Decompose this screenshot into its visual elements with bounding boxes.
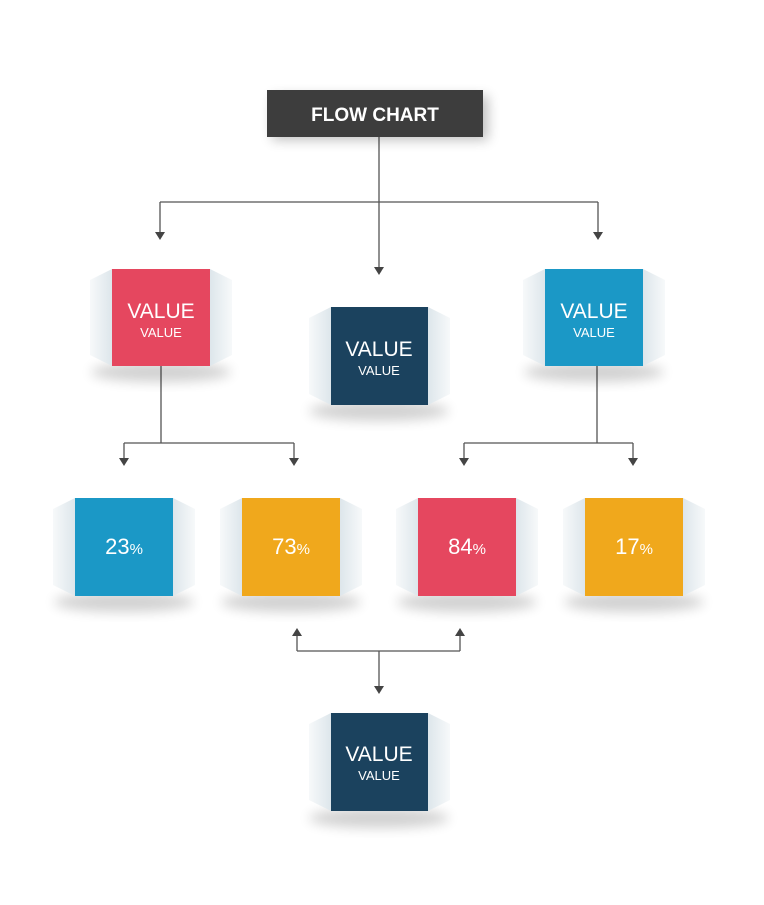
arrowheads	[119, 232, 638, 694]
box: dark value center	[309, 307, 450, 421]
box: dark value bottom: VALUE	[358, 768, 400, 783]
box: blue value right: VALUE	[573, 325, 615, 340]
box: 84%	[396, 498, 538, 612]
connector lines	[124, 137, 633, 691]
box: 73%	[220, 498, 362, 612]
box: blue value right: VALUE	[560, 300, 628, 323]
box: 17%: 17%	[615, 534, 653, 559]
box: 23%: 23%	[105, 534, 143, 559]
box: red value left	[90, 269, 232, 382]
box: red value left: VALUE	[127, 300, 195, 323]
box: 73%: 73%	[272, 534, 310, 559]
title: FLOW CHART	[311, 105, 439, 126]
box: 23%	[53, 498, 195, 612]
box: 84%: 84%	[448, 534, 486, 559]
box: dark value bottom	[309, 713, 450, 828]
box: 17%	[563, 498, 705, 612]
box: dark value bottom: VALUE	[345, 743, 413, 766]
title	[267, 90, 488, 140]
box: dark value center: VALUE	[345, 338, 413, 361]
box: red value left: VALUE	[140, 325, 182, 340]
box: dark value center: VALUE	[358, 363, 400, 378]
box: blue value right	[523, 269, 665, 382]
